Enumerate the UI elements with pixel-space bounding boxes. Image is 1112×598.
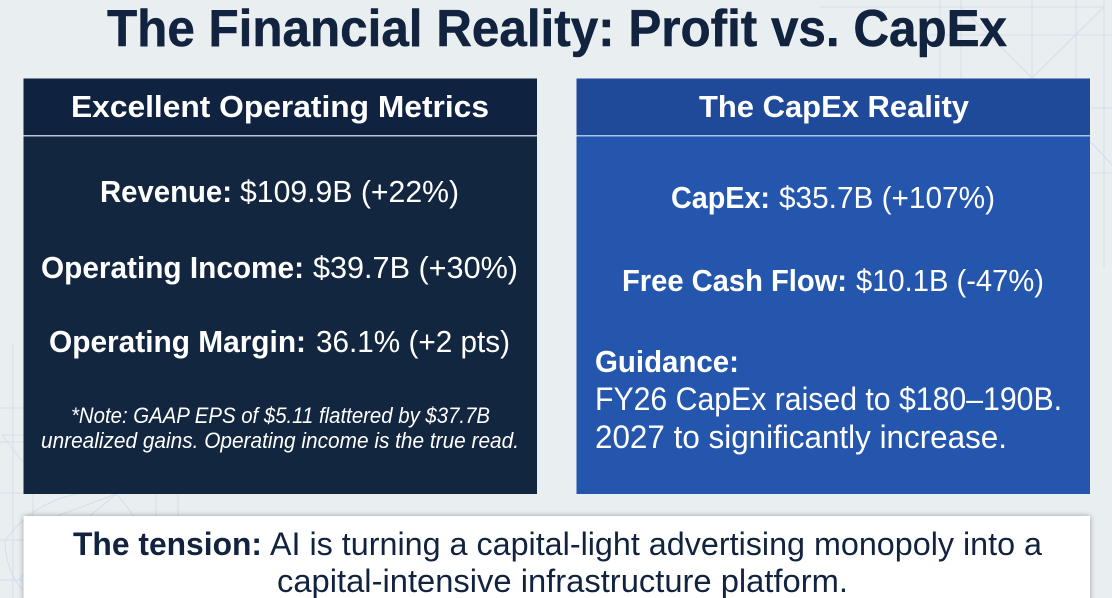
panel header: capex reality: The CapEx Reality xyxy=(699,89,970,124)
title: The Financial Reality: Profit vs. CapEx xyxy=(107,0,1007,58)
note: GAAP EPS xyxy=(41,403,519,453)
panel header: capex reality xyxy=(576,78,1090,136)
metric: operating margin: 36.1% (+2 pts) xyxy=(316,324,510,359)
note: GAAP EPS: unrealized gains. Operating income is the true read. xyxy=(41,428,519,453)
metric: operating income: $39.7B (+30%) xyxy=(313,250,518,285)
metric: revenue: $109.9B (+22%) xyxy=(240,174,459,209)
guidance text: 2027 to significantly increase. xyxy=(595,419,1007,455)
metric: free cash flow xyxy=(622,263,1044,298)
callout: the tension: capital-intensive infrastructure platform. xyxy=(277,563,848,598)
panel header: operating metrics xyxy=(24,78,537,136)
callout: the tension: The tension: xyxy=(73,526,262,562)
metric: revenue: Revenue: xyxy=(100,174,232,209)
metric: free cash flow: $10.1B (-47%) xyxy=(856,263,1044,298)
guidance text: FY26 CapEx raised to $180–190B. xyxy=(595,381,1062,417)
callout: the tension: AI is turning a capital-light advertising monopoly into a xyxy=(270,526,1042,562)
callout: the tension xyxy=(24,516,1090,598)
guidance text xyxy=(595,344,1062,455)
metric: operating income xyxy=(41,250,518,285)
metric: operating income: Operating Income: xyxy=(41,250,304,285)
metric: capex: CapEx: xyxy=(671,180,770,215)
metric: operating margin: Operating Margin: xyxy=(49,324,306,359)
panel: excellent operating metrics xyxy=(24,78,537,494)
metric: revenue xyxy=(100,174,459,209)
metric: capex: $35.7B (+107%) xyxy=(779,180,995,215)
metric: free cash flow: Free Cash Flow: xyxy=(622,263,847,298)
guidance text: Guidance: xyxy=(595,344,739,379)
note: GAAP EPS: *Note: GAAP EPS of $5.11 flattered by $37.7B xyxy=(71,403,490,428)
metric: operating margin xyxy=(49,324,510,359)
panel: the capex reality xyxy=(576,78,1090,494)
metric: capex xyxy=(671,180,995,215)
panel header: operating metrics: Excellent Operating Metrics xyxy=(71,89,489,124)
